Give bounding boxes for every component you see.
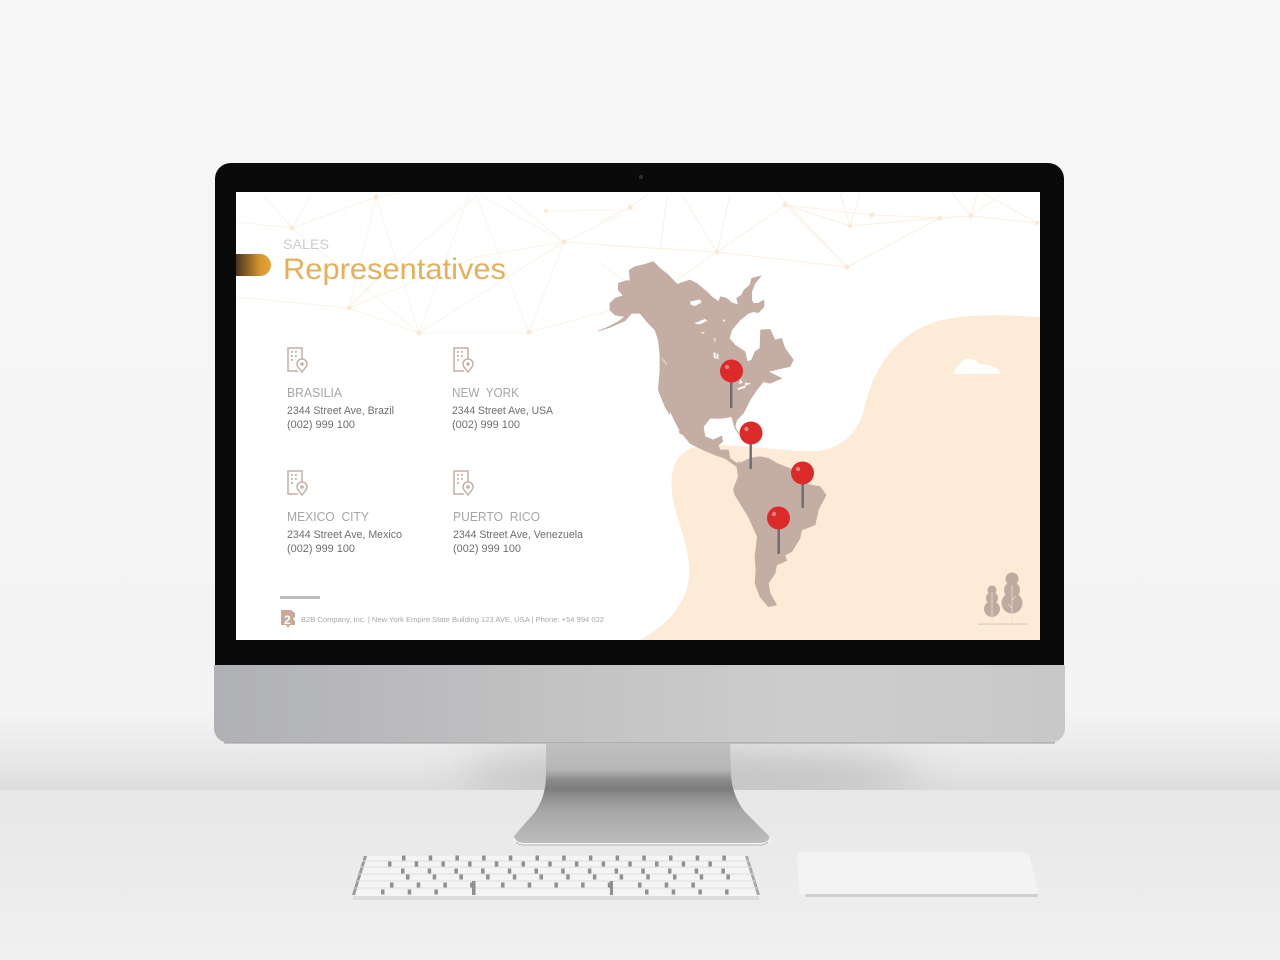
contact: Mexico City: 2344 Street Ave, Mexico [287,529,402,541]
contact: Puerto Rico: (002) 999 100 [453,543,521,555]
icon: cloud [953,359,1000,374]
network line pattern [236,193,1037,333]
eyebrow: SALES: SALES [283,236,329,252]
contact: New York: NEW YORK [452,386,520,400]
keyboard key gaps [381,858,736,892]
trackpad [797,852,1038,897]
map: South America [733,457,826,607]
footer logo: 2 [284,613,291,627]
contact: Brasilia: (002) 999 100 [287,419,355,431]
slide screen [236,192,1040,640]
footer text: B2B Company, Inc. | New York Empire State Building 123 AVE, USA | Phone: +54 994 022 [301,615,604,624]
desk surface [0,790,1280,960]
keyboard [352,856,760,900]
footer [280,596,604,628]
pin: Venezuela [740,422,762,469]
title [236,236,506,286]
contact: Puerto Rico: 2344 Street Ave, Venezuela [453,529,584,541]
pin: USA [720,360,743,408]
monitor body [214,163,1065,743]
map: lakes [630,299,751,432]
contact: New York [452,348,554,431]
contact: Mexico City: MEXICO CITY [287,510,370,524]
contact: Puerto Rico [453,471,584,555]
contact: Puerto Rico: PUERTO RICO [453,510,540,524]
monitor stand [513,744,771,846]
icon: trees [978,572,1028,625]
title accent pill [236,254,271,276]
pin: Paraguay [767,506,790,554]
footer logo [281,610,295,628]
pin: Brazil [791,462,814,508]
cream blob background [640,315,1040,640]
contact: Brasilia: BRASILIA [287,386,343,400]
stand shadow on wall [460,745,920,805]
heading: Representatives: Representatives [283,253,506,286]
contact: New York: 2344 Street Ave, USA [452,405,554,417]
map: North and Central America [598,262,793,467]
contact: New York: (002) 999 100 [452,419,520,431]
contact: Mexico City [287,471,402,555]
contact: Mexico City: (002) 999 100 [287,543,355,555]
contact: Brasilia [287,348,394,431]
contact: Brasilia: 2344 Street Ave, Brazil [287,405,394,417]
keyboard key rows [355,861,757,888]
